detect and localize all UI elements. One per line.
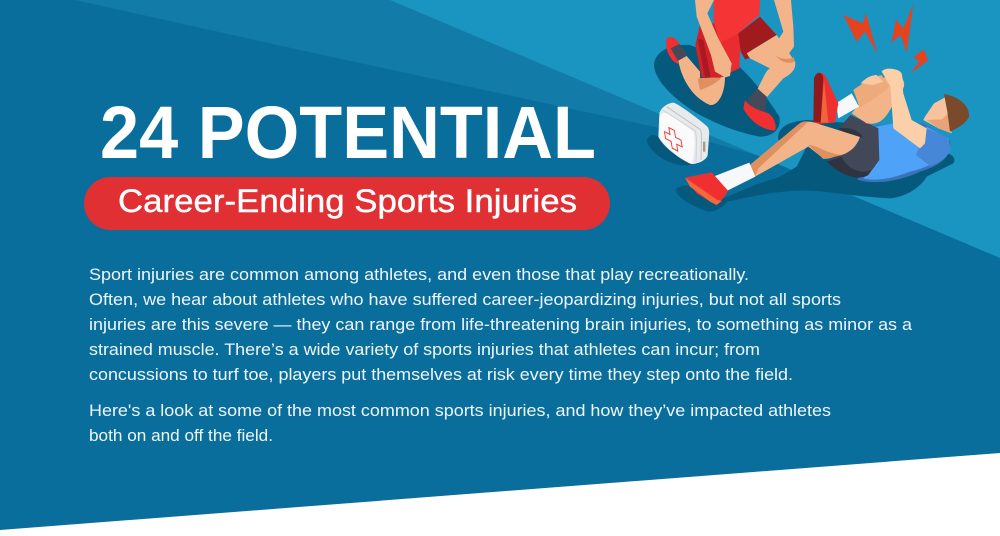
intro paragraph: Often, we hear about athletes who have suffered career-jeopardizing injuries, but not all sports bbox=[89, 290, 841, 309]
icon: first aid kit bbox=[647, 103, 709, 165]
subtitle banner bbox=[84, 177, 610, 230]
intro paragraph: strained muscle. There’s a wide variety of sports injuries that athletes can incur; from bbox=[89, 340, 760, 359]
closing paragraph: both on and off the field. bbox=[89, 426, 273, 445]
intro paragraph: injuries are this severe — they can range from life-threatening brain injuries, to something as minor as a bbox=[89, 315, 913, 334]
injured athlete straight leg bbox=[685, 121, 860, 205]
helper figure in red bbox=[654, 0, 795, 137]
illustration: injured athlete with helper bbox=[647, 0, 969, 212]
subtitle banner: Career-Ending Sports Injuries bbox=[118, 183, 577, 219]
icon: pain lightning bolts bbox=[843, 4, 928, 73]
closing paragraph bbox=[89, 401, 831, 445]
closing paragraph: Here's a look at some of the most common sports injuries, and how they’ve impacted athletes bbox=[89, 401, 831, 420]
icon: red cross bbox=[663, 125, 683, 154]
intro paragraph bbox=[89, 265, 913, 384]
title: 24 POTENTIAL bbox=[100, 91, 596, 174]
injured athlete torso and bent leg bbox=[813, 69, 969, 182]
intro paragraph: Sport injuries are common among athletes, and even those that play recreationally. bbox=[89, 265, 749, 284]
athlete shadow bbox=[676, 120, 954, 212]
intro paragraph: concussions to turf toe, players put themselves at risk every time they step onto the field. bbox=[89, 365, 793, 384]
